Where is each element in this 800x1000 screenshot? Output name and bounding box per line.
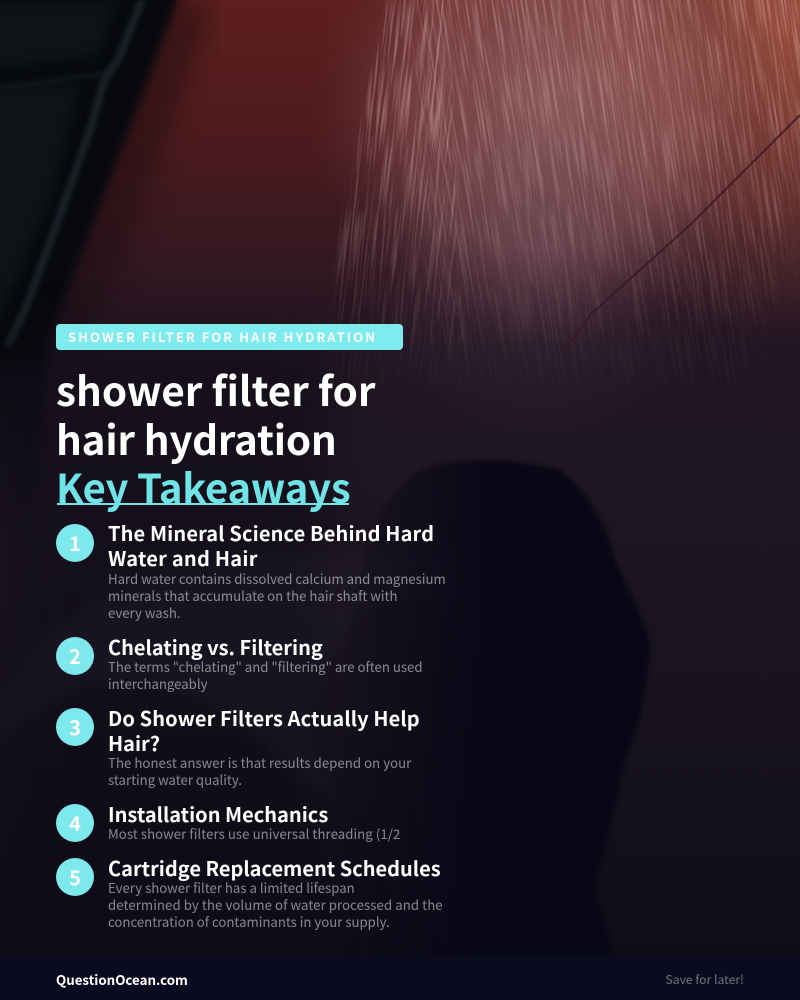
- footer note: Save for later!: [665, 970, 744, 988]
- takeaway 3: The honest answer is that results depend on your: [108, 753, 411, 772]
- takeaway 3: starting water quality.: [108, 770, 242, 789]
- takeaway 5: 5: [69, 862, 81, 891]
- takeaway 4: 4: [69, 808, 81, 837]
- takeaway 2: interchangeably: [108, 674, 207, 693]
- silhouette: head and hair: [340, 460, 650, 960]
- main title: Key Takeaways: [56, 457, 350, 515]
- takeaway 5: determined by the volume of water processed and the: [108, 895, 443, 914]
- main title: shower filter for: [56, 359, 376, 418]
- takeaway 1: Water and Hair: [108, 543, 258, 572]
- takeaway 3: [56, 703, 420, 789]
- takeaway 3: Hair?: [108, 728, 160, 757]
- category tag: [56, 324, 403, 350]
- takeaway 5: Every shower filter has a limited lifespan: [108, 878, 355, 897]
- takeaway 1: [56, 518, 446, 622]
- main title: [56, 359, 376, 515]
- takeaway 5: [56, 853, 443, 931]
- category tag: SHOWER FILTER FOR HAIR HYDRATION: [68, 327, 377, 346]
- takeaway 5: concentration of contaminants in your supply.: [108, 912, 390, 931]
- takeaway 4: Installation Mechanics: [108, 799, 328, 828]
- takeaway 2: Chelating vs. Filtering: [108, 632, 323, 661]
- takeaway 2: 2: [69, 641, 81, 670]
- footer bar: [0, 956, 800, 1000]
- main title: hair hydration: [56, 408, 337, 467]
- takeaway 1: Hard water contains dissolved calcium and magnesium: [108, 569, 446, 588]
- dark corner with shower pipe: [0, 0, 182, 560]
- takeaway 4: Most shower filters use universal threading (1/2: [108, 824, 400, 843]
- takeaway 3: 3: [69, 712, 81, 741]
- footer brand: QuestionOcean.com: [56, 970, 188, 989]
- takeaway 5: Cartridge Replacement Schedules: [108, 853, 441, 882]
- takeaway 4: [56, 799, 400, 843]
- water streaks: fan of spray: [412, 0, 800, 358]
- takeaway 1: The Mineral Science Behind Hard: [108, 518, 434, 547]
- takeaway 1: 1: [69, 528, 81, 557]
- silhouette: raised hand and arm: [0, 548, 512, 800]
- takeaway 2: The terms "chelating" and "filtering" are often used: [108, 657, 422, 676]
- takeaway 2: [56, 632, 422, 693]
- takeaway 1: minerals that accumulate on the hair shaft with: [108, 586, 398, 605]
- takeaway 3: Do Shower Filters Actually Help: [108, 703, 420, 732]
- takeaway 1: every wash.: [108, 603, 181, 622]
